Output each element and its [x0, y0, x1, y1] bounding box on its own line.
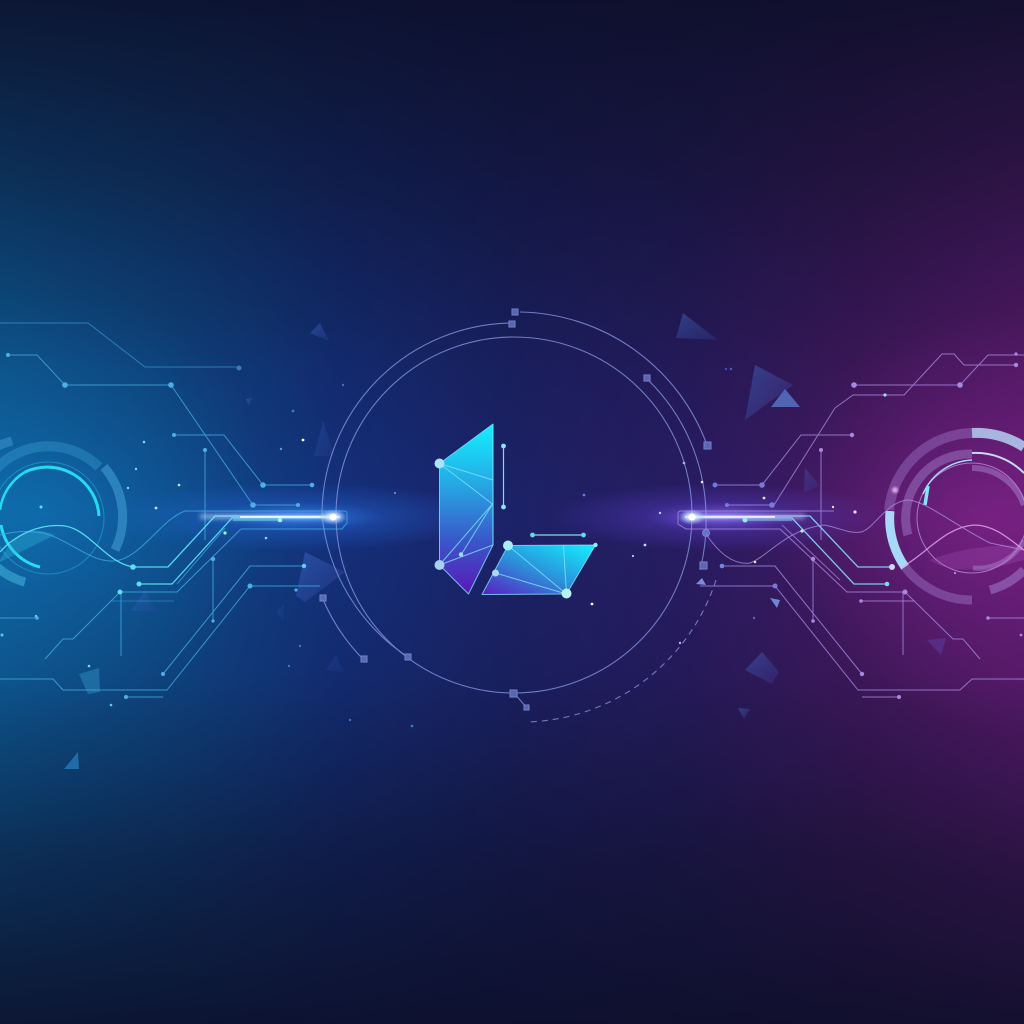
left circuit lines — [0, 323, 347, 697]
floating triangles right — [676, 313, 946, 719]
logo — [434, 424, 598, 598]
particles — [0, 368, 956, 727]
logo: vertical connector — [501, 444, 506, 509]
logo: left shard — [434, 424, 493, 594]
left bright wires — [0, 516, 333, 584]
central rings — [320, 309, 716, 722]
left circuit nodes — [6, 353, 314, 699]
bright beam right — [678, 509, 805, 525]
logo: lower shard — [482, 540, 598, 598]
floating triangles left — [64, 323, 345, 769]
light streaks — [110, 483, 890, 551]
right circuit nodes — [712, 352, 1022, 699]
right gauge — [889, 433, 1024, 600]
logo: horizontal connector — [530, 533, 586, 537]
left gauge — [0, 441, 123, 582]
bright beam left — [200, 509, 347, 525]
right circuit lines — [678, 354, 1024, 697]
right bright wires — [692, 516, 892, 584]
